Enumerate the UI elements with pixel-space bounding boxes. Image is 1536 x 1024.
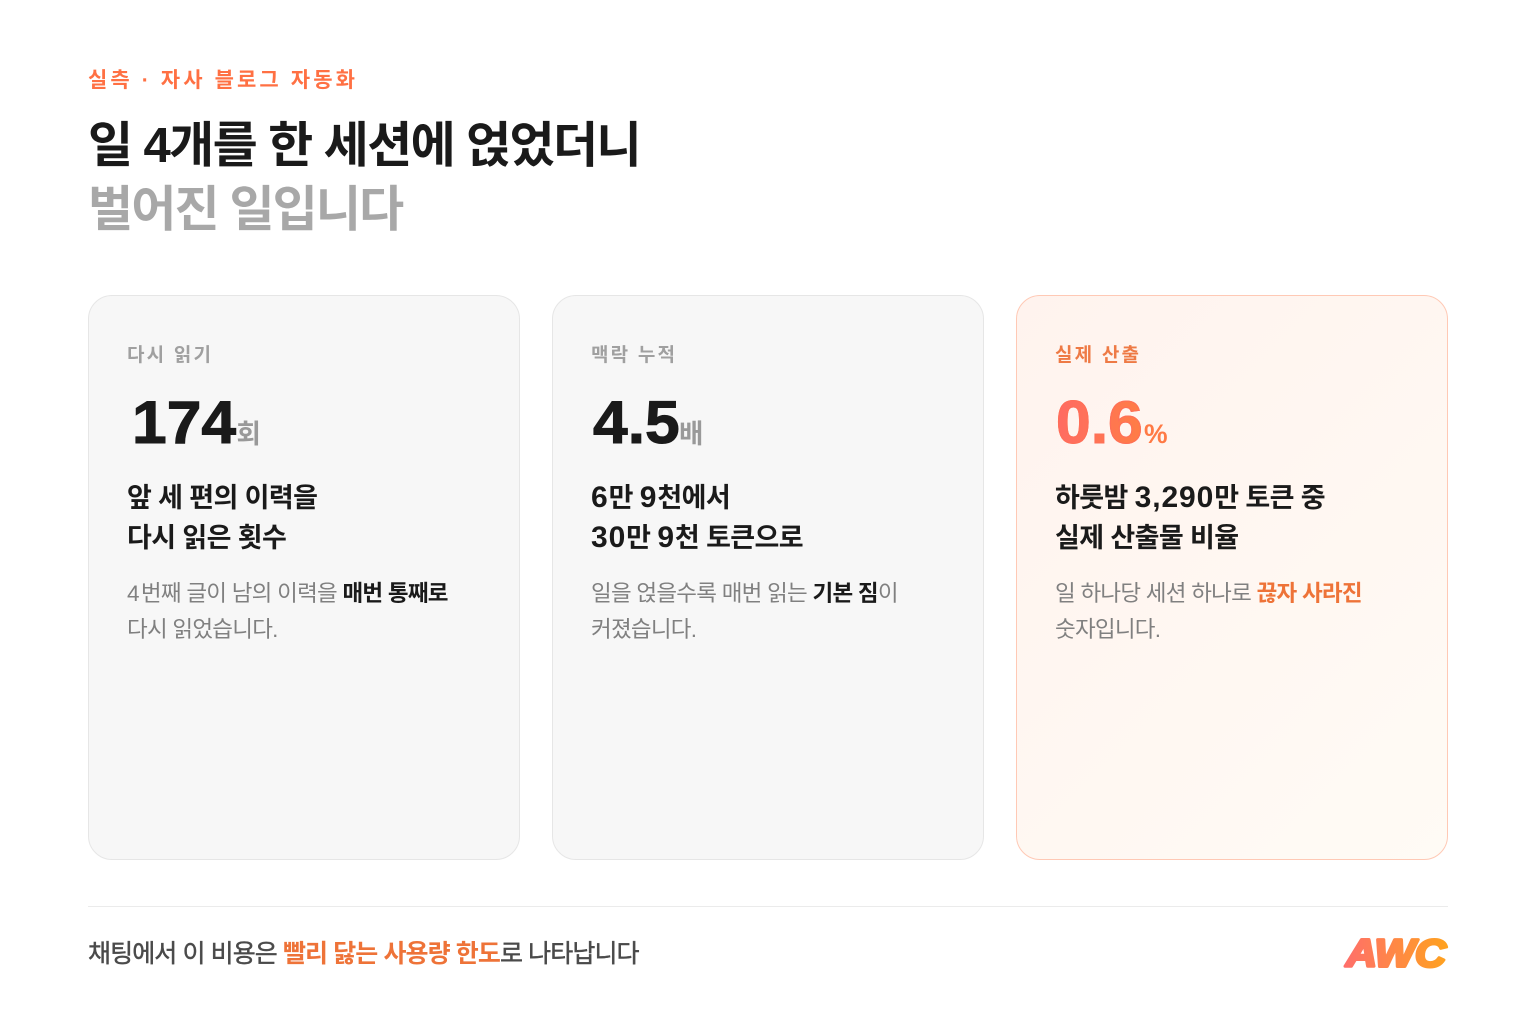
footer text: 채팅에서 이 비용은 빨리 닳는 사용량 한도로 나타납니다 (88, 940, 639, 968)
card heading: 하룻밤 3,290만 토큰 중 (1055, 481, 1325, 514)
title line 2: 벌어진 일입니다 (88, 183, 402, 237)
panel: 다시 읽기 (88, 295, 520, 860)
big number: 0.6: 0.6 (1056, 389, 1143, 456)
card description (127, 580, 448, 642)
card description: 일을 얹을수록 매번 읽는 기본 짐이 (591, 580, 898, 606)
label: 맥락 누적 (591, 345, 677, 366)
card heading: 앞 세 편의 이력을 (127, 483, 317, 513)
card description: 커졌습니다. (591, 616, 696, 642)
panel: 실제 산출 (1016, 295, 1448, 860)
card description: 다시 읽었습니다. (127, 616, 278, 642)
card description (1055, 580, 1362, 642)
card heading: 30만 9천 토큰으로 (591, 521, 803, 554)
label: 다시 읽기 (127, 345, 213, 366)
panel: 맥락 누적 (552, 295, 984, 860)
card heading (127, 483, 317, 553)
unit: % (1144, 419, 1168, 449)
footer divider (88, 906, 1448, 907)
big number: 174: 174 (132, 389, 236, 456)
card heading (1055, 481, 1325, 553)
label: 실제 산출 (1055, 345, 1141, 366)
card heading: 다시 읽은 횟수 (127, 523, 286, 553)
card description: 일 하나당 세션 하나로 끊자 사라진 (1055, 580, 1362, 606)
card heading (591, 481, 803, 554)
eyebrow: 실측 · 자사 블로그 자동화 (88, 69, 358, 92)
unit: 배 (679, 419, 703, 449)
card description: 4번째 글이 남의 이력을 매번 통째로 (127, 580, 448, 606)
card description (591, 580, 898, 642)
unit: 회 (236, 419, 261, 449)
card heading: 6만 9천에서 (591, 481, 730, 514)
card heading: 실제 산출물 비율 (1055, 523, 1238, 553)
title line 1: 일 4개를 한 세션에 얹었더니 (88, 119, 640, 173)
card description: 숫자입니다. (1055, 616, 1160, 642)
big number: 4.5: 4.5 (593, 389, 680, 456)
